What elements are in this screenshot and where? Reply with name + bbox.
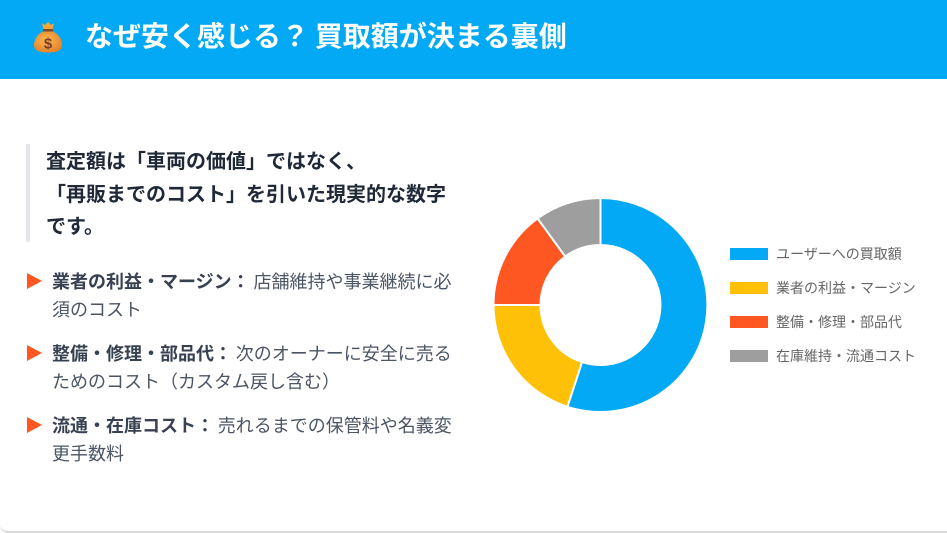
segment: margin 20% (493, 305, 582, 407)
segment: user purchase price 55% (567, 198, 707, 412)
legend: repair: 整備・修理・部品代 (776, 314, 902, 330)
lead statement: です。 (46, 216, 104, 238)
icon: arrow marker (27, 417, 42, 433)
list item: profit margin: 須のコスト (52, 300, 142, 320)
legend: margin: 業者の利益・マージン (776, 280, 916, 296)
legend: user price: ユーザーへの買取額 (776, 246, 902, 262)
donut chart (494, 199, 706, 411)
title: なぜ安く感じる？ 買取額が決まる裏側 (85, 21, 567, 52)
list item: repair parts (27, 344, 452, 392)
legend: inventory: 在庫維持・流通コスト (776, 348, 916, 364)
lead statement: 査定額は「車両の価値」ではなく、 (46, 151, 366, 173)
list item: repair parts: 整備・修理・部品代： 次のオーナーに安全に売る (52, 344, 452, 364)
segment: repair 15% (493, 218, 565, 305)
segment: inventory 10% (538, 198, 600, 256)
lead statement (26, 144, 450, 242)
header band (0, 0, 947, 79)
list item: profit margin: 業者の利益・マージン： 店舗維持や事業継続に必 (52, 272, 451, 292)
list item: distribution (27, 416, 452, 464)
list item: profit margin (27, 272, 451, 320)
list item: repair parts: ためのコスト（カスタム戻し含む） (52, 372, 340, 392)
icon: arrow marker (27, 273, 42, 289)
list item: distribution: 流通・在庫コスト： 売れるまでの保管料や名義変 (52, 416, 452, 436)
icon: money bag (34, 22, 62, 52)
icon: money bag: $ (44, 36, 53, 52)
list item: distribution: 更手数料 (52, 444, 124, 464)
lead statement: 「再販までのコスト」を引いた現実的な数字 (46, 184, 446, 206)
icon: arrow marker (27, 345, 42, 361)
